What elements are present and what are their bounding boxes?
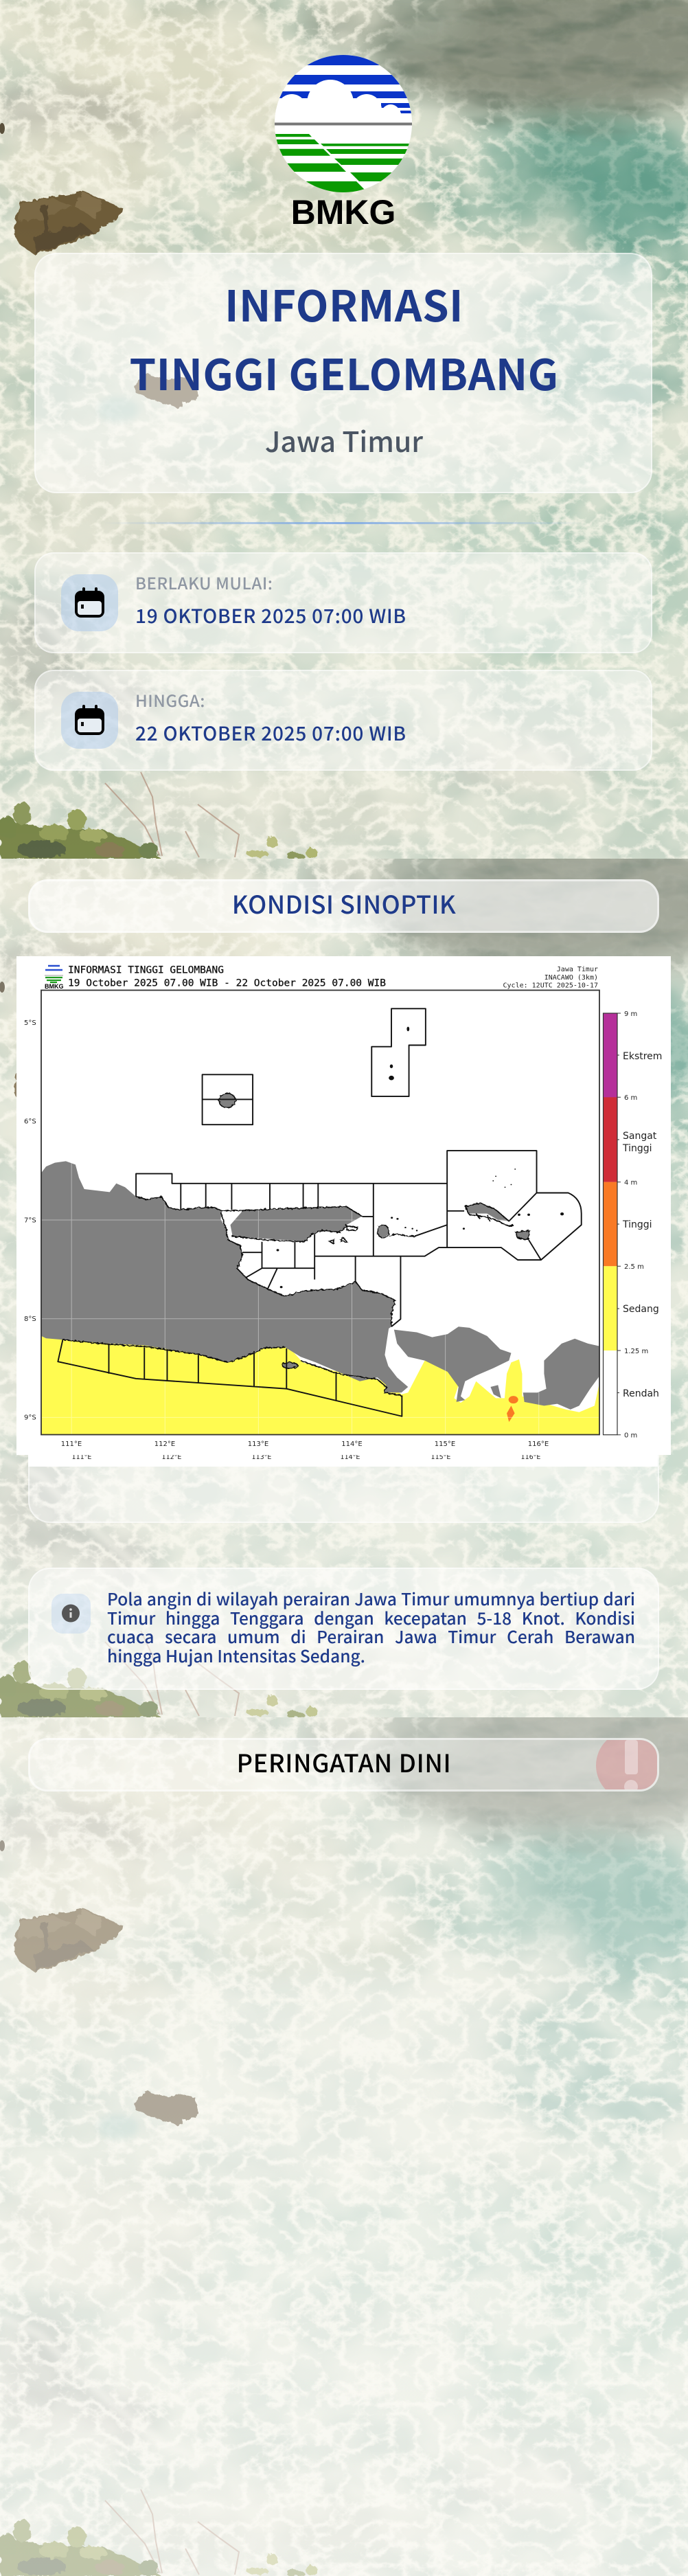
- axis labels: 115°E: [435, 1440, 455, 1448]
- divider: [103, 522, 584, 524]
- colorbar labels: 6 m: [624, 1094, 637, 1102]
- label: hingga: HINGGA:: [135, 688, 205, 712]
- map image sheet: [16, 956, 671, 1455]
- map source info: Cycle: 12UTC 2025-10-17: [503, 982, 598, 990]
- map shapes: [41, 990, 600, 1435]
- colorbar labels: Sangat: [623, 1131, 657, 1142]
- axis labels: [24, 1019, 549, 1448]
- colorbar labels: 1.25 m: [624, 1348, 648, 1355]
- grid lines: [41, 990, 600, 1435]
- subtitle: jawa timur: Jawa Timur: [265, 419, 423, 460]
- axis labels: 5°S: [24, 1019, 36, 1027]
- panel: end date: [34, 670, 652, 771]
- chart: wave height map: [16, 956, 671, 1467]
- land: lombok: [523, 1339, 600, 1410]
- sea: high waves: [507, 1396, 518, 1422]
- underlying tick labels: 111°E: [72, 1454, 91, 1461]
- icon: calendar end: [61, 692, 118, 749]
- colorbar labels: [622, 1010, 662, 1440]
- heading: informasi: INFORMASI: [225, 272, 463, 334]
- map title: INFORMASI TINGGI GELOMBANG: [68, 965, 224, 976]
- text: synoptic description: cuaca secara umum di Perairan Jawa Timur Cerah Berawan: [107, 1625, 635, 1649]
- axis labels: 7°S: [24, 1217, 36, 1224]
- colorbar labels: Rendah: [623, 1388, 659, 1399]
- mini logo: BMKG: [45, 983, 64, 990]
- map title: [68, 965, 386, 988]
- value: start date: 19 OKTOBER 2025 07:00 WIB: [135, 602, 406, 629]
- underlying image sheet: [28, 1443, 658, 1467]
- logo: BMKG: BMKG: [291, 193, 395, 231]
- panel: map container: [28, 956, 659, 1523]
- axis labels: 113°E: [248, 1440, 268, 1448]
- underlying tick labels: 114°E: [341, 1454, 360, 1461]
- axis labels: 116°E: [528, 1440, 549, 1448]
- label: berlaku mulai: BERLAKU MULAI:: [135, 570, 273, 594]
- axis labels: 6°S: [24, 1118, 36, 1125]
- colorbar labels: Tinggi: [622, 1219, 652, 1230]
- colorbar labels: 4 m: [624, 1179, 637, 1187]
- colorbar labels: Sedang: [623, 1304, 659, 1315]
- underlying tick labels: [72, 1454, 540, 1461]
- land: madura: [230, 1207, 362, 1242]
- axis labels: 111°E: [61, 1440, 82, 1448]
- panel: kondisi sinoptik heading: [28, 879, 659, 933]
- axis labels: 9°S: [24, 1414, 36, 1422]
- text: synoptic description: hingga Hujan Intensitas Sedang.: [107, 1644, 365, 1668]
- coastlines: [62, 1094, 529, 1396]
- colorbar labels: 0 m: [624, 1432, 637, 1440]
- land: bali: [394, 1326, 511, 1402]
- axis labels: 112°E: [154, 1440, 175, 1448]
- underlying tick labels: 115°E: [431, 1454, 450, 1461]
- map source info: Jawa Timur: [557, 966, 598, 973]
- mini logo: [45, 963, 64, 990]
- logo: BMKG: [275, 55, 412, 231]
- text: synoptic description: Timur hingga Tenggara dengan kecepatan 5-18 Knot. Kondisi: [107, 1606, 635, 1630]
- small islands: [219, 1094, 529, 1368]
- map source info: INACAWO (3km): [544, 974, 598, 982]
- panel: start date: [34, 552, 652, 653]
- text: synoptic description: Pola angin di wilayah perairan Jawa Timur umumnya bertiup dari: [107, 1587, 635, 1611]
- underlying tick labels: 116°E: [521, 1454, 540, 1461]
- land: java: [41, 1161, 408, 1392]
- axis labels: 8°S: [24, 1315, 36, 1323]
- icon: warning sign: [596, 1740, 657, 1789]
- icon: calendar start: [61, 574, 118, 631]
- colorbar labels: Ekstrem: [623, 1051, 662, 1062]
- value: end date: 22 OKTOBER 2025 07:00 WIB: [135, 719, 406, 747]
- panel: synoptic info: [28, 1568, 659, 1690]
- text: synoptic description: [107, 1587, 635, 1668]
- colorbar: [603, 1013, 621, 1435]
- heading: tinggi gelombang: TINGGI GELOMBANG: [129, 341, 559, 403]
- heading: kondisi sinoptik: KONDISI SINOPTIK: [232, 885, 456, 921]
- panel: peringatan dini heading: [28, 1738, 659, 1792]
- boundaries: [58, 1008, 582, 1416]
- axes frame: [41, 991, 599, 1434]
- colorbar labels: Tinggi: [622, 1143, 652, 1154]
- map source info: [503, 966, 598, 990]
- heading: peringatan dini: PERINGATAN DINI: [237, 1744, 451, 1780]
- axis labels: 114°E: [341, 1440, 363, 1448]
- colorbar labels: 9 m: [624, 1010, 637, 1018]
- sea: moderate waves: [41, 1336, 600, 1435]
- underlying tick labels: 112°E: [162, 1454, 181, 1461]
- underlying tick labels: 113°E: [252, 1454, 271, 1461]
- panel: title: [34, 253, 652, 493]
- icon: info: [51, 1594, 91, 1634]
- map title: 19 October 2025 07.00 WIB - 22 October 2025 07.00 WIB: [68, 978, 386, 988]
- tiny islands: [277, 1027, 564, 1288]
- colorbar labels: 2.5 m: [624, 1263, 644, 1271]
